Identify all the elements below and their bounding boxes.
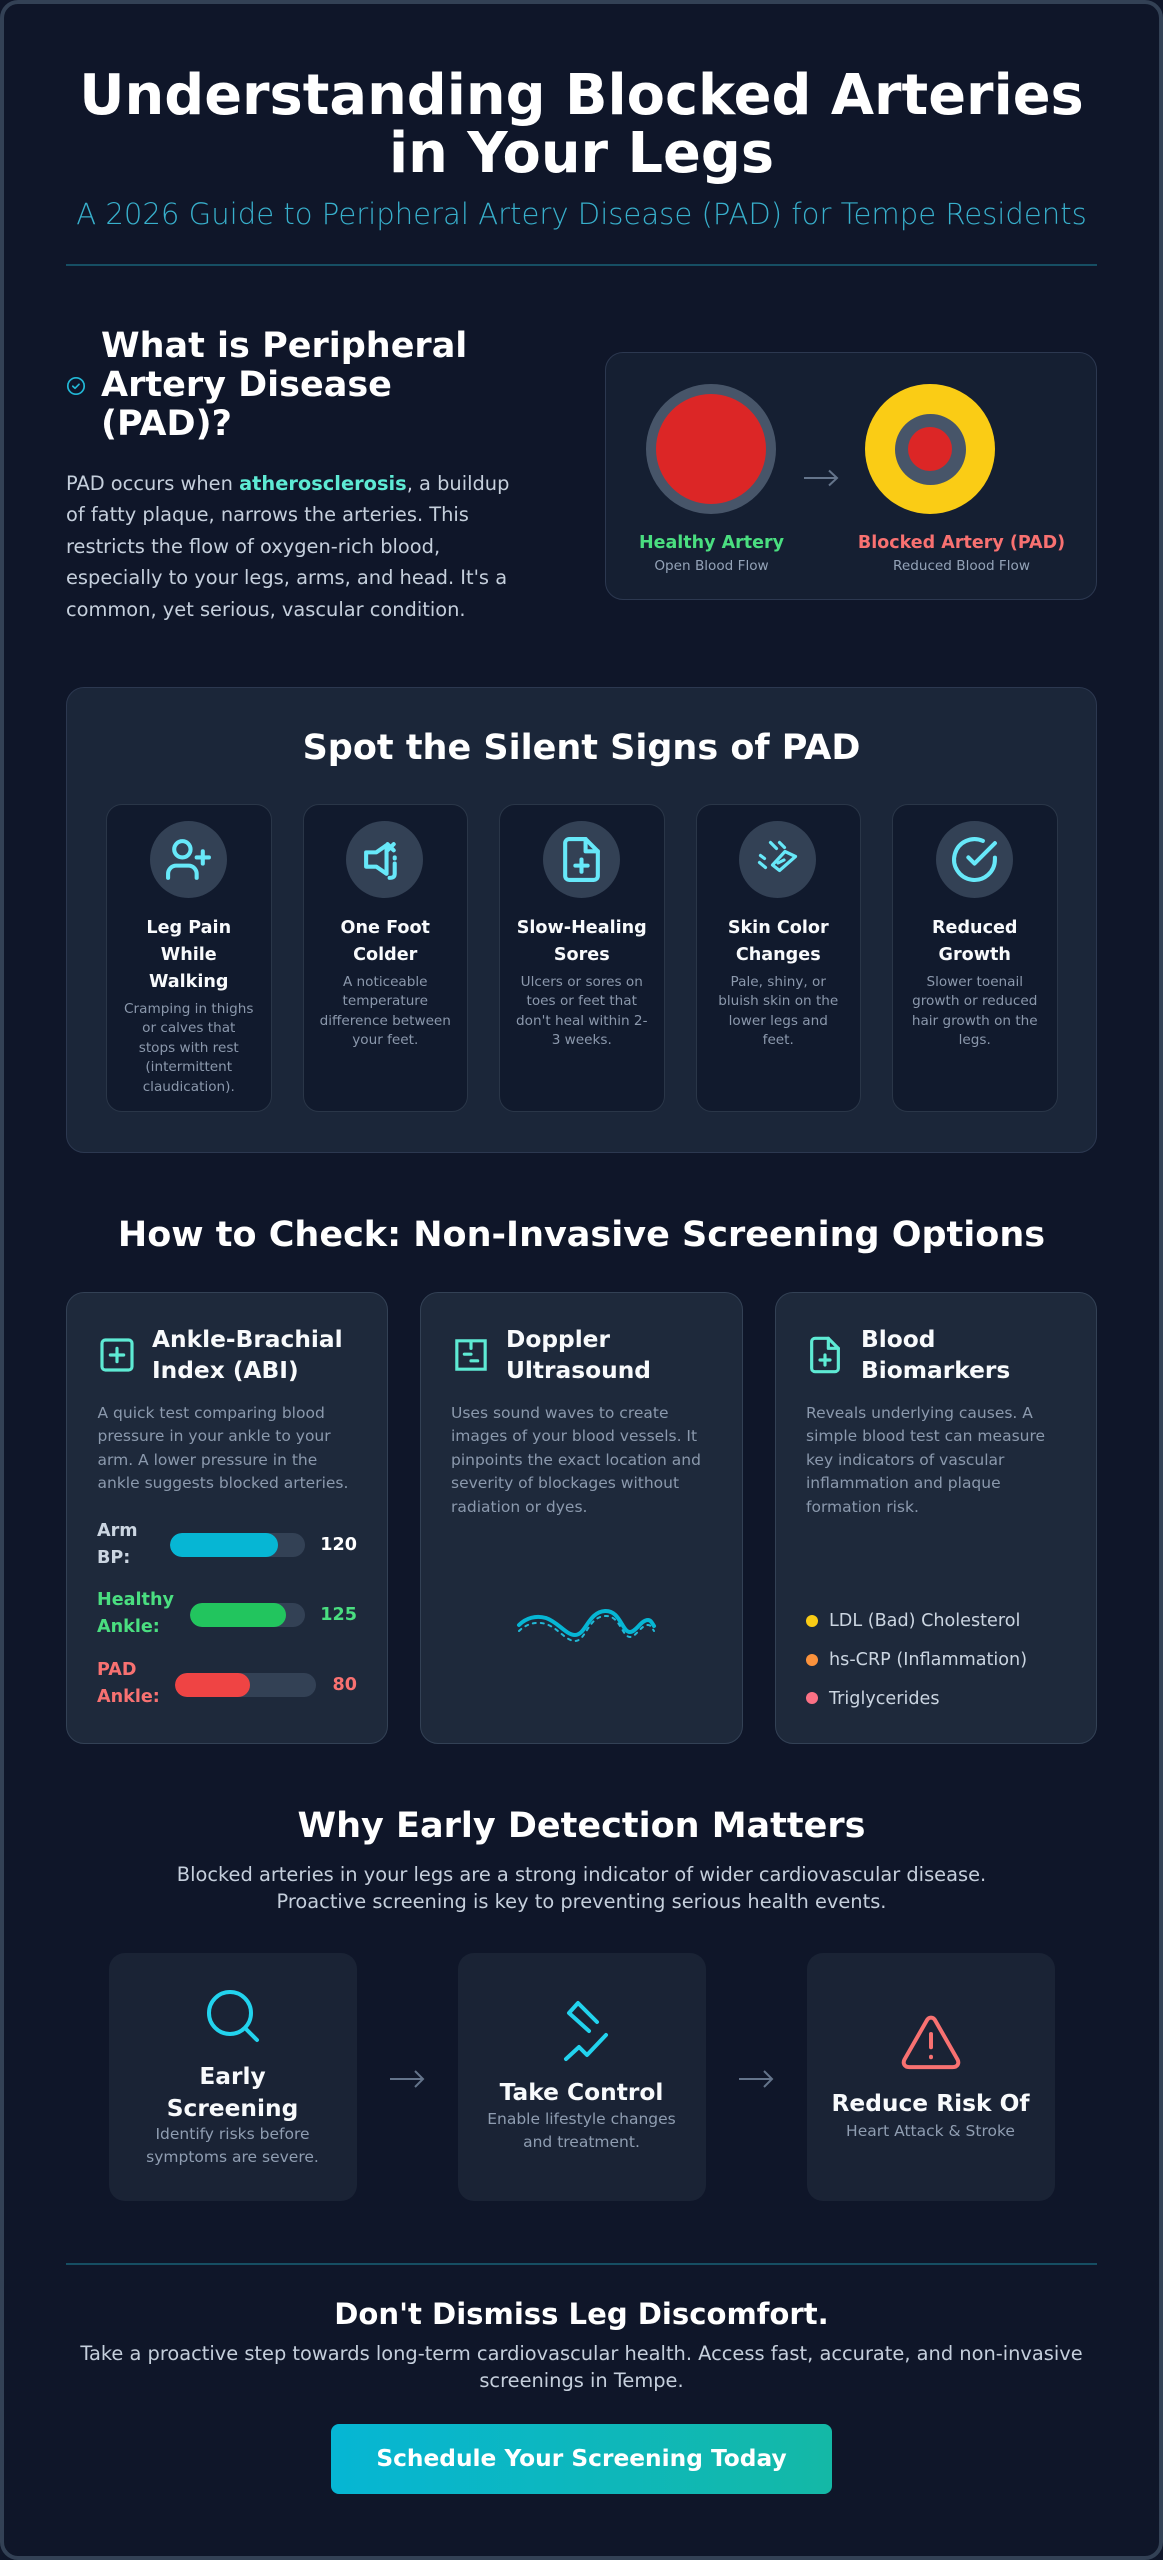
list item: LDL: LDL (Bad) Cholesterol	[829, 1611, 1020, 1631]
step text	[487, 2110, 676, 2151]
heading: ABI: Ankle-Brachial	[152, 1326, 343, 1352]
sign card: leg pain	[106, 804, 272, 1112]
step text	[146, 2125, 319, 2166]
sign text: toes or feet that	[527, 993, 637, 1009]
icon: blocked artery	[865, 384, 995, 514]
text: early detection: Blocked arteries in your legs are a strong indicator of wider cardiovascular disease.	[177, 1862, 986, 1886]
sign title: Growth	[939, 945, 1011, 965]
step title	[167, 2062, 298, 2122]
sign title	[341, 918, 430, 965]
heading: biomarkers: Biomarkers	[861, 1356, 1010, 1384]
text: doppler: pinpoints the exact location and	[451, 1450, 701, 1468]
sign title: One Foot	[341, 918, 430, 938]
arrow	[390, 2070, 424, 2088]
text: biomarkers: inflammation and plaque	[806, 1474, 1001, 1492]
text: doppler: Uses sound waves to create	[451, 1404, 669, 1422]
bar: healthy ankle: Ankle:	[97, 1617, 160, 1637]
bar: PAD ankle: PAD	[97, 1660, 136, 1680]
sign text: or calves that	[142, 1020, 235, 1036]
label: blocked artery: Reduced Blood Flow	[893, 558, 1030, 574]
button: schedule screening: Schedule Your Screening Today	[376, 2445, 787, 2472]
sign text: Ulcers or sores on	[521, 974, 643, 990]
paragraph: PAD definition: restricts the flow of oxygen-rich blood,	[66, 534, 440, 558]
step card: reduce risk	[806, 1953, 1054, 2201]
text: doppler	[451, 1404, 701, 1516]
sign text: legs.	[959, 1032, 991, 1048]
heading: ABI	[152, 1326, 343, 1384]
icon: file plus	[543, 821, 620, 898]
icon: healthy artery	[646, 384, 776, 514]
bar: healthy ankle: Healthy	[97, 1590, 174, 1610]
sign text: feet.	[763, 1032, 794, 1048]
icon: check circle	[936, 821, 1013, 898]
step text: Heart Attack & Stroke	[846, 2122, 1015, 2140]
call to action text	[40, 2340, 1123, 2394]
heading: doppler	[506, 1326, 651, 1384]
heading: biomarkers	[861, 1326, 1010, 1384]
text: early detection	[177, 1862, 986, 1913]
bar: arm BP: Arm	[97, 1521, 138, 1541]
bar: healthy ankle	[97, 1590, 357, 1637]
text: biomarkers: formation risk.	[806, 1498, 919, 1516]
label: healthy artery: Healthy Artery	[639, 533, 784, 553]
step title: Screening	[167, 2094, 298, 2122]
sign text: claudication).	[143, 1079, 235, 1095]
sign title: Sores	[554, 945, 610, 965]
bar: arm BP: 120	[320, 1535, 357, 1555]
panel: silent signs	[66, 687, 1097, 1153]
paragraph: PAD definition: common, yet serious, vascular condition.	[66, 598, 466, 620]
sign text	[124, 1001, 253, 1095]
sign text: growth or reduced	[912, 993, 1037, 1009]
sign text	[912, 974, 1038, 1048]
heading: doppler: Ultrasound	[506, 1356, 651, 1384]
button: schedule screening	[331, 2424, 832, 2494]
icon: search	[207, 1990, 260, 2042]
heading: what is PAD: What is Peripheral	[101, 326, 467, 366]
heading: biomarkers: Blood	[861, 1326, 935, 1352]
step text: and treatment.	[523, 2133, 640, 2151]
paragraph: PAD definition: especially to your legs, arms, and head. It's a	[66, 566, 507, 589]
title: Understanding Blocked Arteries	[79, 63, 1084, 128]
sign text: hair growth on the	[912, 1013, 1038, 1029]
subtitle: A 2026 Guide to Peripheral Artery Disease (PAD) for Tempe Residents	[76, 197, 1087, 231]
panel: ABI	[66, 1292, 388, 1744]
list: biomarkers	[806, 1615, 818, 1704]
sign text: Pale, shiny, or	[731, 974, 826, 990]
call to action text: Take a proactive step towards long-term cardiovascular health. Access fast, accurate, and non-invasive	[80, 2342, 1083, 2364]
text: ABI: A quick test comparing blood	[98, 1404, 325, 1422]
heading: early detection: Why Early Detection Matters	[298, 1806, 865, 1846]
heading: what is PAD: Artery Disease	[101, 365, 392, 405]
text: biomarkers	[806, 1404, 1045, 1516]
sign title: Changes	[736, 945, 821, 965]
sign text	[718, 974, 838, 1048]
sign text: A noticeable	[343, 974, 428, 990]
arrow	[739, 2070, 774, 2088]
title: in Your Legs	[389, 121, 774, 186]
sign text: your feet.	[352, 1032, 418, 1048]
sign title: Colder	[353, 945, 417, 965]
sign text: 3 weeks.	[552, 1032, 612, 1048]
sign text	[320, 974, 451, 1048]
sign text: Cramping in thighs	[124, 1001, 253, 1017]
icon: check circle	[66, 377, 85, 395]
heading: what is PAD	[101, 326, 467, 444]
label: blocked artery: Blocked Artery (PAD)	[858, 533, 1065, 553]
sign title	[517, 918, 647, 965]
icon: doppler device	[455, 1339, 487, 1371]
icon: brush	[739, 821, 816, 898]
sign text	[516, 974, 647, 1048]
heading: screening options: How to Check: Non-Invasive Screening Options	[118, 1214, 1045, 1254]
sign card: cold foot	[302, 804, 468, 1112]
step text: symptoms are severe.	[146, 2148, 319, 2166]
text: early detection: Proactive screening is key to preventing serious health events.	[277, 1890, 886, 1913]
step card: early screening	[108, 1953, 356, 2201]
bar: healthy ankle: 125	[320, 1605, 357, 1625]
title	[79, 63, 1084, 186]
bar: arm BP	[97, 1521, 357, 1568]
text: ABI: arm. A lower pressure in the	[98, 1450, 317, 1468]
sign text: difference between	[320, 1013, 451, 1029]
text: biomarkers: Reveals underlying causes. A	[806, 1404, 1033, 1422]
step title: Early	[199, 2062, 266, 2090]
list item: triglycerides: Triglycerides	[829, 1688, 940, 1708]
sign text: stops with rest	[139, 1040, 239, 1056]
sign text: Slower toenail	[926, 974, 1023, 990]
sign card: reduced growth	[892, 804, 1058, 1112]
call to action text: screenings in Tempe.	[479, 2369, 684, 2392]
panel: biomarkers	[775, 1292, 1097, 1744]
section: what is PAD	[66, 326, 509, 620]
sign text: temperature	[343, 993, 428, 1009]
sign title: Slow-Healing	[517, 918, 647, 938]
sign text: don't heal within 2-	[516, 1013, 647, 1029]
panel: artery comparison	[605, 352, 1097, 600]
icon: control	[564, 2000, 608, 2062]
sign title	[932, 918, 1018, 965]
sign title: While	[161, 945, 217, 965]
sign title: Skin Color	[728, 918, 829, 938]
sign text: bluish skin on the	[718, 993, 838, 1009]
sign card: sores	[499, 804, 664, 1112]
heading: doppler: Doppler	[506, 1326, 610, 1352]
step text: Enable lifestyle changes	[487, 2110, 676, 2128]
arrow	[804, 470, 838, 486]
icon: plus square	[100, 1338, 134, 1372]
text: biomarkers: key indicators of vascular	[806, 1450, 1004, 1468]
heading: what is PAD: (PAD)?	[101, 404, 232, 444]
sign title	[728, 918, 829, 965]
bar: arm BP: BP:	[97, 1548, 130, 1568]
text: ABI: ankle suggests blocked arteries.	[98, 1474, 348, 1492]
heading: silent signs: Spot the Silent Signs of PAD	[303, 728, 860, 768]
sign title: Walking	[149, 972, 229, 992]
text: doppler: images of your blood vessels. It	[451, 1427, 697, 1445]
step card: take control	[458, 1953, 706, 2201]
text: doppler: severity of blockages without	[451, 1474, 679, 1492]
icon: warning triangle	[900, 2015, 962, 2070]
text: biomarkers: simple blood test can measure	[806, 1427, 1045, 1445]
bar: PAD ankle	[97, 1660, 357, 1707]
paragraph: PAD definition: PAD occurs when atherosclerosis, a buildup	[66, 472, 509, 494]
text: doppler: radiation or dyes.	[451, 1498, 587, 1516]
sign title: Reduced	[932, 918, 1018, 938]
icon: file plus	[810, 1336, 840, 1374]
call to action heading: Don't Dismiss Leg Discomfort.	[334, 2296, 829, 2330]
label: blocked artery	[858, 533, 1065, 574]
step title: Reduce Risk Of	[831, 2090, 1030, 2117]
bar: PAD ankle: 80	[333, 1675, 357, 1695]
bar: PAD ankle: Ankle:	[97, 1687, 160, 1707]
list item: CRP: hs-CRP (Inflammation)	[829, 1650, 1027, 1670]
icon: speaker	[346, 821, 423, 898]
panel: doppler	[420, 1292, 743, 1744]
sign title	[146, 918, 231, 992]
label: healthy artery	[639, 533, 784, 574]
step text: Identify risks before	[155, 2125, 310, 2143]
paragraph: PAD definition	[66, 472, 509, 620]
chart: doppler waveform	[516, 1609, 656, 1642]
text: ABI: pressure in your ankle to your	[98, 1427, 331, 1445]
step title: Take Control	[500, 2079, 663, 2106]
sign text: lower legs and	[729, 1013, 828, 1029]
label: healthy artery: Open Blood Flow	[654, 558, 769, 574]
sign title: Leg Pain	[146, 918, 231, 938]
text: ABI	[98, 1404, 348, 1492]
sign text: (intermittent	[145, 1059, 232, 1075]
heading: ABI: Index (ABI)	[152, 1356, 299, 1384]
paragraph: PAD definition: of fatty plaque, narrows the arteries. This	[66, 503, 469, 526]
icon: person plus	[150, 821, 227, 898]
sign card: skin color	[696, 804, 861, 1112]
